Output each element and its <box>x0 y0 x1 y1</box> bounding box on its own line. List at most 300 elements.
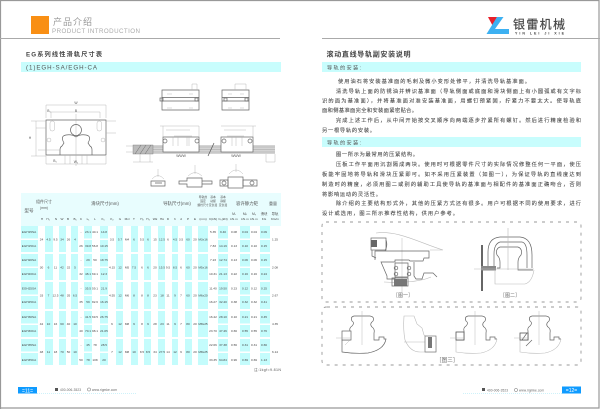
table row: EGH20: 15.5 <box>159 266 165 270</box>
figure two <box>474 228 534 299</box>
table row: EGH15: 4 <box>74 238 76 242</box>
table header labels: W <box>61 217 64 221</box>
table row: EGH25: 48 <box>60 294 64 298</box>
table row: EGH15: 5.5 <box>140 238 144 242</box>
table row: EGH20: 69.1 <box>92 272 98 276</box>
table row: EGH15: 24 <box>40 238 43 242</box>
table row: EGH20: 0.06 <box>251 258 257 262</box>
table header labels: Wʀ <box>153 217 158 221</box>
table header labels: C <box>80 217 83 221</box>
table row: EGH15: 20 <box>193 238 197 242</box>
table row: EGH25: 0.41 <box>261 300 267 304</box>
band: rail installation 2 <box>322 137 581 147</box>
table header labels: d <box>180 217 182 221</box>
table row: EGH25: 59 <box>86 300 90 304</box>
left sub-heading band <box>21 62 281 72</box>
table header labels: H₃ <box>146 217 150 221</box>
right heading: 滚动直线导轨副安装说明 <box>326 50 410 58</box>
drawing: top views of blocks <box>160 84 249 110</box>
table header labels: 基本 <box>220 195 226 199</box>
caption: figure two: ［图二］ <box>500 292 520 299</box>
table row: EGH25: 7 <box>48 294 50 298</box>
table header labels: (mm) <box>199 217 207 221</box>
company pinyin: YIN LEI JI XIE <box>515 32 565 36</box>
table row: EGH30: 40 <box>79 329 83 333</box>
table row: EGH25: 0.32 <box>242 300 248 304</box>
table row: EGH25: 0.12 <box>242 286 248 290</box>
table row: EGH15: 14.19 <box>219 244 227 248</box>
table row: EGH25: 0.25 <box>261 286 267 290</box>
table header labels: 基本 <box>210 195 216 199</box>
drawing: front section view: B₁ <box>53 159 58 163</box>
table row: EGH35: 10 <box>73 350 77 354</box>
table header labels: B₁ <box>73 217 77 221</box>
table row: EGH35: 18 <box>54 350 57 354</box>
table row: EGH15: 26 <box>79 244 83 248</box>
table row: EGH30: 0.21 <box>242 315 248 319</box>
text block: installation steps: 识的面为基准面），并将基准面对准安装基准面，用螺钉预紧固，拧紧力不要太大。使导轨底 <box>322 96 581 104</box>
table header labels: C₀(kN) <box>218 217 228 221</box>
table row: EGH30: 9 <box>174 322 176 326</box>
table header labels: D <box>167 217 170 221</box>
table row: EGH25: 7 <box>180 294 182 298</box>
table row: EGH35: 34 <box>153 350 157 354</box>
table row: EGH20: 10.31 <box>209 272 217 276</box>
table row: EGH25: 6.5 <box>73 294 77 298</box>
drawing: front section view: H <box>29 136 32 140</box>
text block: clamping structures: 设计或选用，图三所示推荐性结构，供用户参考。 <box>322 209 458 217</box>
table row: EGH15: 12.5 <box>159 238 165 242</box>
table header labels: L₁ <box>87 217 89 221</box>
right footer: www.rigmke.com <box>519 388 544 392</box>
drawing: side view of rail with blocks <box>126 126 275 162</box>
table header labels: (mm) <box>40 206 48 210</box>
icons: mounting sketches <box>151 164 257 188</box>
table header labels: C(kN) <box>209 217 217 221</box>
table row: EGH15: 0.10 <box>242 244 248 248</box>
text block: installation steps: 面和侧基准面完全和安装面紧密贴合。 <box>322 106 417 114</box>
left footer: 400-006-3523 <box>60 388 81 392</box>
table row: EGH25: 9 <box>174 294 176 298</box>
table row: EGH25: 11 <box>166 294 170 298</box>
table header labels: 定负载 <box>209 203 217 207</box>
table header labels: K₂ <box>110 217 114 221</box>
table row: EGH20: 0.22 <box>231 272 237 276</box>
table header labels: kN·m <box>230 217 238 221</box>
figure three d <box>514 311 561 353</box>
table row: EGH35: 0.31 <box>242 343 248 347</box>
table row: EGH25: 0.32 <box>251 300 257 304</box>
table row: EGH35: 12 <box>173 350 177 354</box>
table row: EGH30: 6 <box>111 322 113 326</box>
table row: EGH30: 4.35 <box>272 322 278 326</box>
table row: EGH30: 9 <box>147 322 149 326</box>
table row: EGH35: 78 <box>86 358 90 362</box>
table row: EGH30: 42 <box>40 322 43 326</box>
table row: EGH35: 8.5 <box>146 350 150 354</box>
table row: EGH25: 12.5 <box>52 294 59 298</box>
caption: figure one: ［图一］ <box>393 292 413 299</box>
table row: EGH25: 0.12 <box>251 286 257 290</box>
table row: EGH30 <box>22 315 278 333</box>
table header labels: T <box>133 217 135 221</box>
table row: EGH35: M8x25 <box>198 350 208 354</box>
table header labels: G <box>119 217 122 221</box>
text block: clamping structures: 除介绍的主要结构形式外，其他的压紧方式还有很多。用户可根据不同的使用要求，进行 <box>336 199 581 207</box>
table row: EGH20: - <box>80 258 82 262</box>
table row: EGH25: 82.6 <box>92 300 98 304</box>
band: rail installation 1 <box>322 62 581 72</box>
table header labels: kN·m <box>241 217 249 221</box>
table row: EGH20: EGH20CA <box>22 272 37 276</box>
table header labels: Hʀ <box>160 217 164 221</box>
table row: EGH15: 5.7 <box>118 238 122 242</box>
table row: EGH15: M4 <box>125 238 129 242</box>
table row: EGH20: 7.5 <box>132 266 136 270</box>
table row: EGH35: 20 <box>102 358 106 362</box>
left sub-heading band: (1)EGH-SA/EGH-CA <box>26 64 98 72</box>
table row: EGH15: 7.83 <box>210 244 216 248</box>
table row: EGH25: 19.50 <box>219 286 227 290</box>
table row: EGH35: 50 <box>67 350 70 354</box>
table row: EGH25: 32.40 <box>219 300 227 304</box>
table header labels: P <box>187 217 189 221</box>
table row: EGH35: 48 <box>40 350 43 354</box>
table row: EGH30: 0.66 <box>231 329 237 333</box>
table row: EGH35: 12 <box>118 350 122 354</box>
table row: EGH30: M8x25 <box>198 322 208 326</box>
left footer: www.rigmke.com <box>92 388 117 392</box>
table row: EGH20: 12 <box>118 266 122 270</box>
table row: EGH35: 10 <box>132 350 136 354</box>
table header labels: H₂ <box>140 217 145 221</box>
table header labels: 固定 <box>200 199 206 203</box>
drawing: side view of rail with blocks: WWW <box>231 154 242 158</box>
left page header <box>0 16 280 38</box>
table row: EGH15: 23.1 <box>85 230 91 234</box>
text block: installation steps: 另一根导轨的安装。 <box>322 126 375 134</box>
table row: EGH35: 0.69 <box>251 358 257 362</box>
table row: EGH20: M5 <box>125 266 129 270</box>
table row: EGH25: 16.15 <box>100 300 108 304</box>
table row: EGH20: 4.15 <box>109 266 115 270</box>
text block: clamping structures <box>322 150 581 217</box>
table row: EGH30: 9 <box>133 322 135 326</box>
drawing: side view of rail with blocks: WWW <box>176 154 187 158</box>
drawing: front section view: W₂ <box>74 160 79 164</box>
drawing: front section view: B₁ <box>47 109 52 113</box>
table row: EGH20: 6 <box>141 266 143 270</box>
table header labels: H <box>41 217 43 221</box>
table row: EGH20: M5x16 <box>198 266 208 270</box>
text block: installation steps: 使用油石将安装基准面的毛刺及微小变形处修平，并清洗导轨基准面。 <box>338 77 530 85</box>
text block: installation steps <box>322 77 581 134</box>
table row: EGH15: 34 <box>60 238 64 242</box>
table row: EGH15: 6 <box>147 238 149 242</box>
table header labels: h <box>174 217 176 221</box>
table row: EGH30: 0.55 <box>251 329 257 333</box>
table row: EGH20 <box>22 258 278 276</box>
table row: EGH20: 20 <box>153 266 157 270</box>
table row: EGH35: 80 <box>186 350 190 354</box>
table row: EGH15: 0.15 <box>261 244 267 248</box>
table row: EGH20: 48.1 <box>85 272 91 276</box>
table row: EGH35: 37.38 <box>219 343 227 347</box>
table row: EGH35: - <box>80 343 82 347</box>
table row: EGH15: 15 <box>153 238 157 242</box>
table row: EGH15: 3.5 <box>179 238 183 242</box>
table header labels: 导轨 <box>272 211 279 216</box>
text block: clamping structures: 将影响运动的灵活性。 <box>322 190 381 198</box>
table row: EGH25: 8 <box>141 294 143 298</box>
table row: EGH15: 0.04 <box>242 230 248 234</box>
table row: EGH35: 8.5 <box>140 350 144 354</box>
table row: EGH20: 32 <box>67 266 70 270</box>
table row: EGH25: 11.40 <box>209 286 217 290</box>
table row: EGH20: 2.08 <box>272 266 278 270</box>
right footer <box>463 386 581 394</box>
table row: EGH30: 40 <box>67 322 70 326</box>
table row: EGH15: 0.08 <box>231 230 237 234</box>
table row: EGH25: 18 <box>160 294 164 298</box>
table row: EGH15: 56.8 <box>92 244 98 248</box>
table row: EGH30: 41.5 <box>85 315 91 319</box>
table row: EGH20: 12.3 <box>101 272 107 276</box>
text block: installation steps: 清洗导轨上面的防锈油并辨识基准面（导轨侧面或底面和滑块侧面上有小圆弧或有文字标 <box>336 87 581 95</box>
table header labels: 滑块尺寸(mm) <box>91 200 119 207</box>
panel: figures one and two <box>322 222 581 302</box>
table row: EGH20: 5 <box>74 266 76 270</box>
table row: EGH35: 0.66 <box>261 343 267 347</box>
table row: EGH20: 8.5 <box>173 266 177 270</box>
table row: EGH30: 0.21 <box>251 315 257 319</box>
panel: figure three <box>322 307 581 365</box>
table row: EGH30: 26.75 <box>100 315 108 319</box>
table row: EGH30: 28 <box>153 322 157 326</box>
left heading: EG系列线性滑轨尺寸表 <box>26 50 103 58</box>
table row: EGH35: M8 <box>125 350 129 354</box>
table row: EGH20: 0.15 <box>261 258 267 262</box>
table header labels: 滑块 <box>261 211 268 216</box>
table row: EGH30: 98.1 <box>92 329 98 333</box>
figure three a <box>336 311 386 353</box>
table row: EGH20: 50 <box>93 258 97 262</box>
table row: EGH25: 8 <box>147 294 149 298</box>
table row: EGH20: 7.23 <box>210 258 216 262</box>
table row: EGH20: 0.06 <box>242 258 248 262</box>
table row: EGH25: 35 <box>67 294 70 298</box>
table row: EGH20: 0.13 <box>231 258 237 262</box>
table row: EGH35 <box>22 343 278 362</box>
table row: EGH15: 0.10 <box>251 244 257 248</box>
table row: EGH35: 0.69 <box>242 358 248 362</box>
icon: blue Z <box>486 17 509 34</box>
table row: EGH30: M8 <box>125 322 129 326</box>
table row: EGH15: 4.5 <box>46 238 51 242</box>
table row: EGH25 <box>22 286 278 304</box>
table row: EGH25: 21.9 <box>101 286 107 290</box>
table header labels: B <box>67 217 69 221</box>
table row: EGH30: 11 <box>166 322 170 326</box>
logo <box>322 16 600 38</box>
table row: EGH30: 16 <box>54 322 57 326</box>
table row: EGH25: M6x20 <box>198 294 208 298</box>
header title: 产品介绍 <box>53 16 92 27</box>
table row: EGH20: 12.74 <box>219 258 227 262</box>
table row: EGH35: 33.35 <box>209 358 217 362</box>
table row: EGH35: 0.56 <box>231 343 237 347</box>
table row: EGH15: 6 <box>167 238 169 242</box>
table row: EGH20: 6 <box>147 266 149 270</box>
table row: EGH25: 0.23 <box>231 286 237 290</box>
left footer: =11= <box>22 388 33 394</box>
table row: EGH30: 0.76 <box>261 329 267 333</box>
table row: EGH30: 20 <box>193 322 197 326</box>
icon: red triangle <box>488 17 497 26</box>
table row: EGH15: 0.13 <box>231 244 237 248</box>
table header labels: 容许静力矩 <box>236 200 259 207</box>
caption: figure three: ［图三］ <box>436 356 458 364</box>
table row: EGH15: 9.40 <box>220 230 226 234</box>
table row: EGH25: M6 <box>125 294 129 298</box>
table header labels: 螺栓尺寸 <box>197 203 209 207</box>
table row: EGH35: 0.96 <box>231 358 237 362</box>
figure one <box>371 233 443 299</box>
table row: EGH25: 12 <box>118 294 122 298</box>
table header labels: 型号 <box>24 207 34 214</box>
table row: EGH20: 20 <box>193 266 197 270</box>
table row: EGH30: 10 <box>73 322 77 326</box>
table row: EGH15: 14.8 <box>101 230 107 234</box>
table row: EGH35: 20 <box>193 350 197 354</box>
table header labels: KG <box>262 217 267 221</box>
table row: EGH15: 40.1 <box>92 230 98 234</box>
table header labels: K₁ <box>101 217 105 221</box>
table row: EGH15: EGH15CA <box>22 244 37 248</box>
drawing: front section view: B <box>75 109 78 113</box>
table header labels: kN·m <box>250 217 258 221</box>
left footer <box>18 387 136 394</box>
table row: EGH15: EGH15SA <box>22 230 37 234</box>
table row: EGH35: 78 <box>93 343 97 347</box>
table header labels: 静额 <box>220 199 226 203</box>
table row: EGH20: EGH20SA <box>22 258 37 262</box>
table row: EGH15: 3.5 <box>110 238 114 242</box>
table header background <box>21 193 281 226</box>
text block: clamping structures: 图一所示为最常用的压紧结构。 <box>336 150 418 158</box>
table header labels: 动额 <box>210 199 216 203</box>
table row: EGH30: 16.42 <box>209 315 217 319</box>
table row: EGH25: 0.38 <box>231 300 237 304</box>
table row: EGH20: 0.16 <box>242 272 248 276</box>
table row: EGH35: EGH35CA <box>22 358 37 362</box>
table row: EGH30: 23 <box>160 322 164 326</box>
figure three c <box>450 311 497 353</box>
table row: EGH35: 11 <box>47 350 50 354</box>
table header labels: N <box>55 217 57 221</box>
table header labels: 定负载 <box>219 203 227 207</box>
table row: EGH30: 70.1 <box>85 329 91 333</box>
table row: EGH20: 0.24 <box>261 272 267 276</box>
table header labels: 导轨的 <box>199 195 207 199</box>
figure three b <box>404 316 436 352</box>
table row: EGH25: 4.55 <box>109 294 115 298</box>
table row: EGH30: 12 <box>118 322 122 326</box>
right footer: =12= <box>566 388 577 394</box>
table: EGH dimensions <box>21 193 281 365</box>
table row: EGH15: - <box>80 230 82 234</box>
table row: EGH35: EGH35SA <box>22 343 37 347</box>
table row: EGH15: 6 <box>133 238 135 242</box>
header subtitle: PRODUCT INTRODUCTION <box>52 28 140 35</box>
text block: clamping structures: 压板工作平面用沉割隔成两块。使用时可根据零件尺寸的实际情况修整任何一平面，使压 <box>336 160 581 168</box>
table row: EGH35: 70 <box>60 350 64 354</box>
table row: EGH35: 64.84 <box>219 358 227 362</box>
drawing: front section view <box>29 101 116 166</box>
table header labels: 重量 <box>269 200 277 206</box>
table row: EGH20: 6 <box>48 266 50 270</box>
table row: EGH30: 28.10 <box>219 315 227 319</box>
table row: EGH15: M3x16 <box>198 238 208 242</box>
table header labels: 组件尺寸 <box>36 198 52 204</box>
right footer: 400-006-3523 <box>487 388 508 392</box>
table row: EGH20: 30 <box>40 266 43 270</box>
table footnote: 注:1kgf=9.81N <box>254 367 281 372</box>
table row: EGH30: 0.55 <box>242 329 248 333</box>
table row: EGH15: 0.04 <box>251 230 257 234</box>
table row: EGH25: 33 <box>40 294 43 298</box>
text block: clamping structures: 板能牢固地将导轨和滑块压紧即可。如不采用压紧装置（如图一），为保证导轨的直线度达到 <box>322 170 581 178</box>
table row: EGH15: 0.09 <box>261 230 267 234</box>
table header labels: E <box>194 217 196 221</box>
table row: EGH15: 60 <box>186 238 190 242</box>
table row: EGH30: 21.05 <box>100 329 108 333</box>
table row: EGH35: 9 <box>180 350 182 354</box>
table row: EGH15: 26 <box>67 238 70 242</box>
table row: EGH20: 29 <box>86 258 90 262</box>
table row: EGH30: 10 <box>47 322 50 326</box>
table row: EGH30: 23.70 <box>209 329 217 333</box>
table header labels: L <box>94 217 96 221</box>
table row: EGH30: 80 <box>186 322 190 326</box>
table header labels: Mᵧ <box>252 212 257 216</box>
text block: installation steps: 完成上述工作后，从中间开始按交叉顺序向两端逐步拧紧所有螺钉。然后进行精度检验和 <box>336 116 581 124</box>
table row: EGH15: 9.5 <box>53 238 58 242</box>
text block: clamping structures: 制造时的精度，必须用图二或别的辅助工具使导轨的基准面与相配件的基准面正确吻合，否则 <box>322 180 581 188</box>
table row: EGH30: 0.10 <box>231 315 237 319</box>
table header labels: Mₚ <box>243 212 248 216</box>
table row: EGH25: 35 <box>79 300 83 304</box>
company name: 银雷机械 <box>513 16 565 32</box>
table row: EGH25: 35.5 <box>85 286 91 290</box>
table row: EGH25: 59.1 <box>92 286 98 290</box>
table row: EGH15: 1.25 <box>272 238 278 242</box>
table row: EGH15: 4.5 <box>173 238 177 242</box>
table row: EGH20: 9.5 <box>166 266 170 270</box>
table row: EGH25: 60 <box>186 294 190 298</box>
table row: EGH30: 8 <box>141 322 143 326</box>
table row: EGH35: 14 <box>166 350 170 354</box>
table header labels: KG/m <box>271 217 279 221</box>
table row: EGH25: EGH25CA <box>22 300 37 304</box>
table row: EGH25: EGH25SA <box>22 286 37 290</box>
table row: EGH25: 20 <box>193 294 197 298</box>
band: rail installation 1: 导轨的安装: <box>327 64 361 72</box>
table row: EGH30: 69.5 <box>92 315 98 319</box>
table row: EGH35: 6.14 <box>272 350 278 354</box>
table row: EGH30: EGH30SA <box>22 315 37 319</box>
table row: EGH35: 50 <box>79 358 83 362</box>
